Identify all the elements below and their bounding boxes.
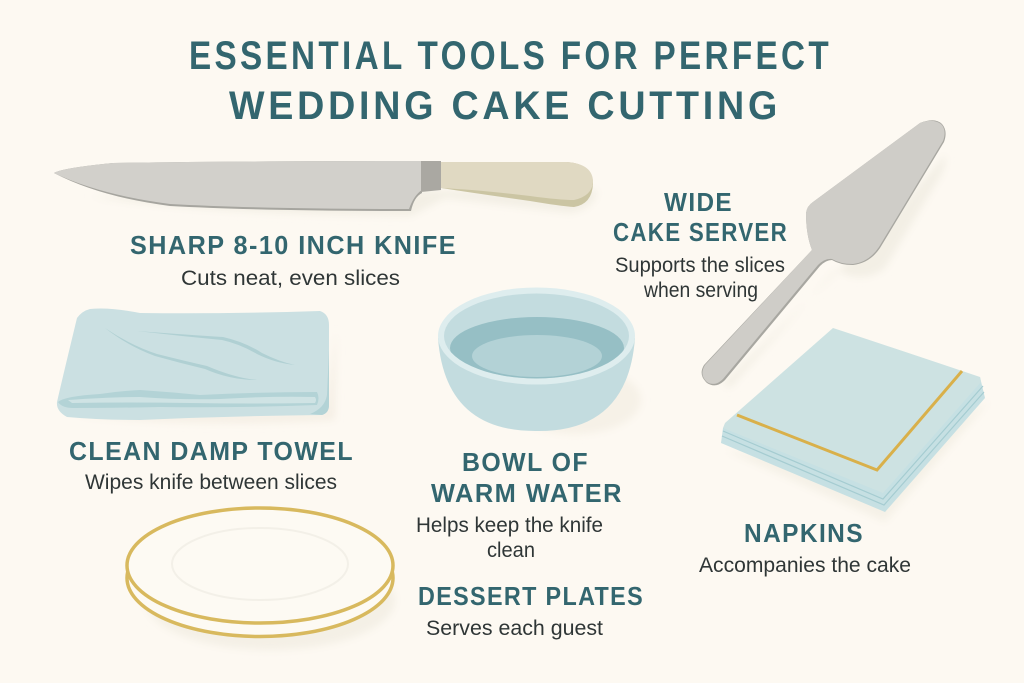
label: bowl: clean bbox=[487, 539, 535, 562]
icon: dessert plates bbox=[127, 508, 395, 650]
label: napkins bbox=[699, 518, 911, 577]
towel fold bbox=[58, 390, 318, 408]
label: cake server: CAKE SERVER bbox=[613, 217, 788, 247]
title: ESSENTIAL TOOLS FOR PERFECT bbox=[189, 34, 832, 78]
label: towel: Wipes knife between slices bbox=[85, 471, 337, 494]
label: bowl: BOWL OF bbox=[462, 447, 589, 477]
title bbox=[189, 34, 832, 128]
label: bowl bbox=[416, 447, 623, 562]
icon: knife bbox=[54, 161, 597, 216]
label: cake server bbox=[613, 187, 788, 302]
label: bowl: WARM WATER bbox=[431, 478, 623, 508]
label: knife bbox=[130, 230, 457, 290]
icon: cake server bbox=[702, 120, 946, 388]
label: cake server: Supports the slices bbox=[615, 254, 785, 277]
label: cake server: when serving bbox=[643, 279, 758, 302]
label: dessert plates bbox=[418, 581, 644, 640]
label: dessert plates: Serves each guest bbox=[426, 617, 603, 640]
towel wrinkles bbox=[105, 328, 295, 380]
label: napkins: Accompanies the cake bbox=[699, 554, 911, 577]
icon: napkins bbox=[721, 328, 990, 522]
icon: towel bbox=[57, 308, 336, 423]
label: towel: CLEAN DAMP TOWEL bbox=[69, 436, 354, 466]
icon: bowl bbox=[438, 288, 641, 434]
label: knife: SHARP 8-10 INCH KNIFE bbox=[130, 230, 457, 260]
label: napkins: NAPKINS bbox=[744, 518, 864, 548]
label: towel bbox=[69, 436, 354, 494]
title: WEDDING CAKE CUTTING bbox=[229, 84, 781, 128]
label: dessert plates: DESSERT PLATES bbox=[418, 581, 644, 611]
label: knife: Cuts neat, even slices bbox=[181, 267, 400, 290]
label: cake server: WIDE bbox=[664, 187, 733, 217]
label: bowl: Helps keep the knife bbox=[416, 514, 603, 537]
